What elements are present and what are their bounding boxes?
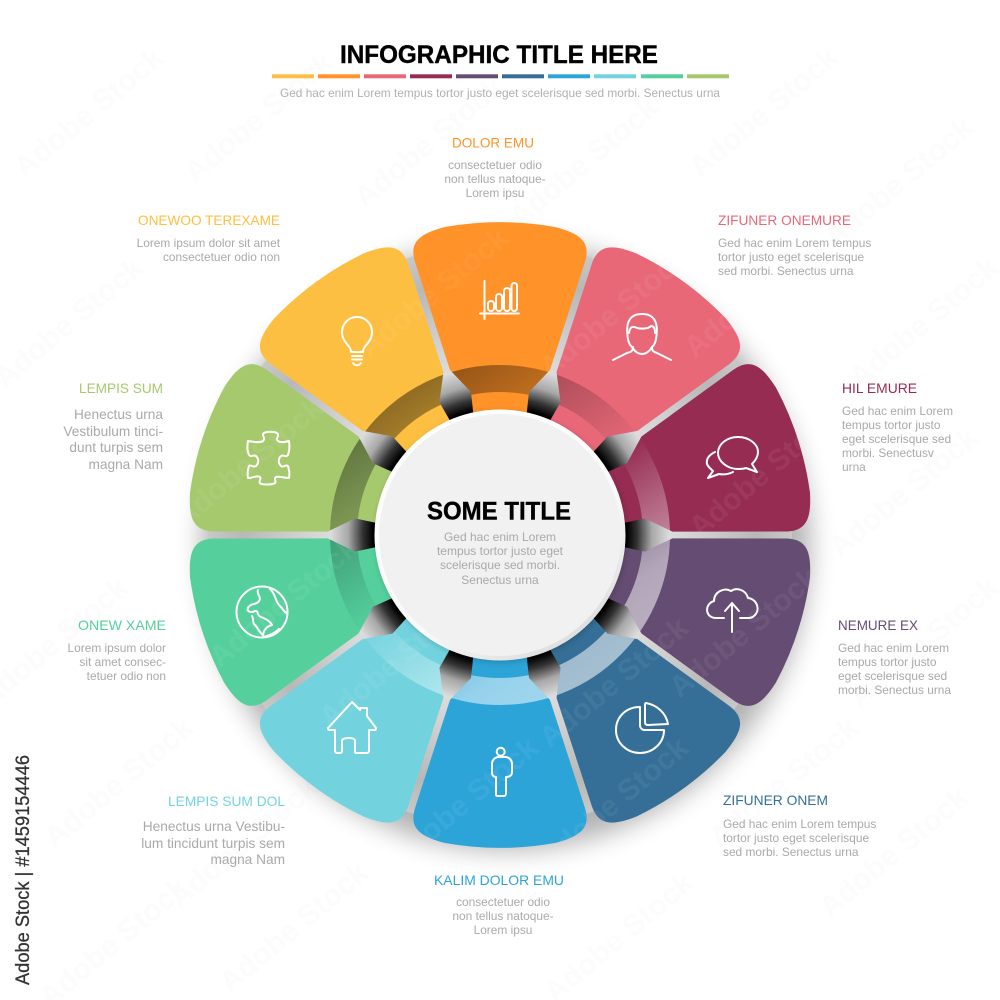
wedge: maroon bbox=[583, 356, 824, 582]
label: zifuner onemure: tortor justo eget scelerisque bbox=[718, 250, 864, 264]
centre text bbox=[437, 530, 564, 587]
label: kalim dolor emu: consectetuer odio bbox=[456, 895, 550, 909]
icon: puzzle piece bbox=[247, 432, 289, 484]
label: dolor emu: DOLOR EMU bbox=[452, 134, 534, 150]
label: onew xame bbox=[68, 617, 166, 683]
icon: house bbox=[328, 702, 376, 753]
wedge: blue bbox=[413, 650, 587, 848]
label: lempis sum dol bbox=[141, 793, 285, 867]
label: nemure ex: tempus tortor justo bbox=[838, 655, 937, 669]
label: nemure ex bbox=[838, 617, 951, 697]
wheel gap background bbox=[208, 243, 792, 827]
label: dolor emu: Lorem ipsu bbox=[466, 186, 524, 200]
label: hil emure: eget scelerisque sed bbox=[842, 432, 951, 446]
centre text: scelerisque sed morbi. bbox=[440, 558, 560, 572]
label: hil emure bbox=[842, 380, 953, 474]
label: hil emure: tempus tortor justo bbox=[842, 418, 941, 432]
watermark over wheel: Adobe Stock bbox=[203, 531, 365, 674]
title: INFOGRAPHIC TITLE HERE bbox=[340, 41, 658, 69]
label: lempis sum: LEMPIS SUM bbox=[79, 380, 163, 396]
label: zifuner onem bbox=[723, 792, 876, 859]
icon: person bbox=[492, 748, 512, 796]
label: hil emure: HIL EMURE bbox=[842, 380, 917, 396]
watermark over wheel: Adobe Stock bbox=[193, 211, 355, 354]
wedge: teal bbox=[246, 577, 503, 839]
translucent ring band across wedges bbox=[344, 378, 656, 692]
stock id side label: Adobe Stock | #1459154446 bbox=[13, 755, 34, 985]
label: lempis sum bbox=[63, 380, 163, 472]
icon: speech bubbles bbox=[707, 437, 758, 478]
label: onewoo terexame bbox=[137, 212, 281, 264]
subtitle: Ged hac enim Lorem tempus tortor justo eget scelerisque sed morbi. Senectus urna bbox=[280, 86, 720, 100]
icon: light bulb bbox=[342, 317, 372, 365]
watermark over wheel: Adobe Stock bbox=[663, 561, 825, 704]
label: lempis sum: Henectus urna bbox=[74, 407, 163, 422]
label: zifuner onem: sed morbi. Senectus urna bbox=[723, 845, 859, 859]
wedge: dark blue bbox=[497, 577, 754, 839]
icon: globe bbox=[236, 586, 288, 638]
icon: man bbox=[613, 314, 671, 360]
label: nemure ex: NEMURE EX bbox=[838, 617, 919, 633]
label: nemure ex: Ged hac enim Lorem bbox=[838, 641, 949, 655]
label: kalim dolor emu bbox=[434, 872, 564, 937]
label: lempis sum: dunt turpis sem bbox=[69, 440, 163, 455]
label: onew xame: Lorem ipsum dolor bbox=[68, 641, 166, 655]
wedge: purple bbox=[583, 488, 824, 714]
colour bars under title bbox=[272, 74, 729, 78]
label: zifuner onemure: Ged hac enim Lorem tempus bbox=[718, 236, 871, 250]
icon: pie chart bbox=[616, 703, 668, 753]
label: nemure ex: eget scelerisque sed bbox=[838, 669, 947, 683]
label: dolor emu bbox=[444, 134, 546, 200]
wedge: green bbox=[176, 488, 417, 714]
label: onew xame: ONEW XAME bbox=[78, 617, 166, 633]
label: onewoo terexame: Lorem ipsum dolor sit amet bbox=[137, 236, 281, 250]
watermark over wheel: Adobe Stock bbox=[383, 731, 545, 874]
label: zifuner onemure: ZIFUNER ONEMURE bbox=[718, 212, 851, 228]
centre text: Senectus urna bbox=[461, 573, 539, 587]
centre title: SOME TITLE bbox=[427, 498, 571, 526]
label: hil emure: Ged hac enim Lorem bbox=[842, 404, 953, 418]
watermark over wheel: Adobe Stock bbox=[533, 611, 695, 754]
label: zifuner onem: ZIFUNER ONEM bbox=[723, 792, 828, 808]
label: lempis sum dol: Henectus urna Vestibu- bbox=[143, 819, 285, 834]
label: kalim dolor emu: non tellus natoque- bbox=[452, 909, 554, 923]
watermark over wheel: Adobe Stock bbox=[168, 391, 330, 534]
label: onew xame: sit amet consec- bbox=[79, 655, 166, 669]
label: zifuner onem: tortor justo eget scelerisque bbox=[723, 831, 869, 845]
label: lempis sum: magna Nam bbox=[88, 457, 163, 472]
label: dolor emu: consectetuer odio bbox=[448, 158, 542, 172]
watermark over wheel: Adobe Stock bbox=[353, 221, 515, 364]
wedge: orange bbox=[413, 222, 587, 420]
label: hil emure: urna bbox=[842, 460, 866, 474]
centre text: Ged hac enim Lorem bbox=[444, 530, 556, 544]
wheel drop shadow bbox=[202, 242, 810, 850]
centre circle bbox=[374, 410, 626, 660]
label: dolor emu: non tellus natoque- bbox=[444, 172, 546, 186]
watermark over wheel: Adobe Stock bbox=[678, 221, 840, 364]
label: zifuner onem: Ged hac enim Lorem tempus bbox=[723, 817, 876, 831]
icon: bar chart bbox=[480, 281, 519, 319]
watermark over wheel: Adobe Stock bbox=[683, 401, 845, 544]
label: zifuner onemure: sed morbi. Senectus urna bbox=[718, 264, 854, 278]
label: kalim dolor emu: KALIM DOLOR EMU bbox=[434, 872, 564, 888]
label: nemure ex: morbi. Senectus urna bbox=[838, 683, 951, 697]
label: lempis sum: Vestibulum tinci- bbox=[63, 424, 163, 439]
wedge: yellow bbox=[246, 231, 503, 493]
label: lempis sum dol: magna Nam bbox=[210, 852, 285, 867]
centre circle shadow bbox=[375, 411, 627, 663]
centre text: tempus tortor justo eget bbox=[437, 544, 564, 558]
label: lempis sum dol: LEMPIS SUM DOL bbox=[168, 793, 285, 809]
watermark over wheel: Adobe Stock bbox=[533, 731, 695, 874]
label: kalim dolor emu: Lorem ipsu bbox=[474, 923, 532, 937]
label: onewoo terexame: consectetuer odio non bbox=[163, 250, 280, 264]
watermark over wheel bbox=[213, 230, 810, 842]
label: lempis sum dol: lum tincidunt turpis sem bbox=[141, 836, 285, 851]
wedge: pink bbox=[497, 231, 754, 493]
wedge: light green bbox=[176, 356, 417, 582]
label: hil emure: morbi. Senectusv bbox=[842, 446, 934, 460]
watermark over wheel: Adobe Stock bbox=[313, 591, 475, 734]
icon: cloud upload bbox=[707, 589, 758, 632]
label: onewoo terexame: ONEWOO TEREXAME bbox=[138, 212, 280, 228]
watermark over wheel: Adobe Stock bbox=[533, 241, 695, 384]
label: onew xame: tetuer odio non bbox=[87, 669, 166, 683]
label: zifuner onemure bbox=[718, 212, 871, 278]
